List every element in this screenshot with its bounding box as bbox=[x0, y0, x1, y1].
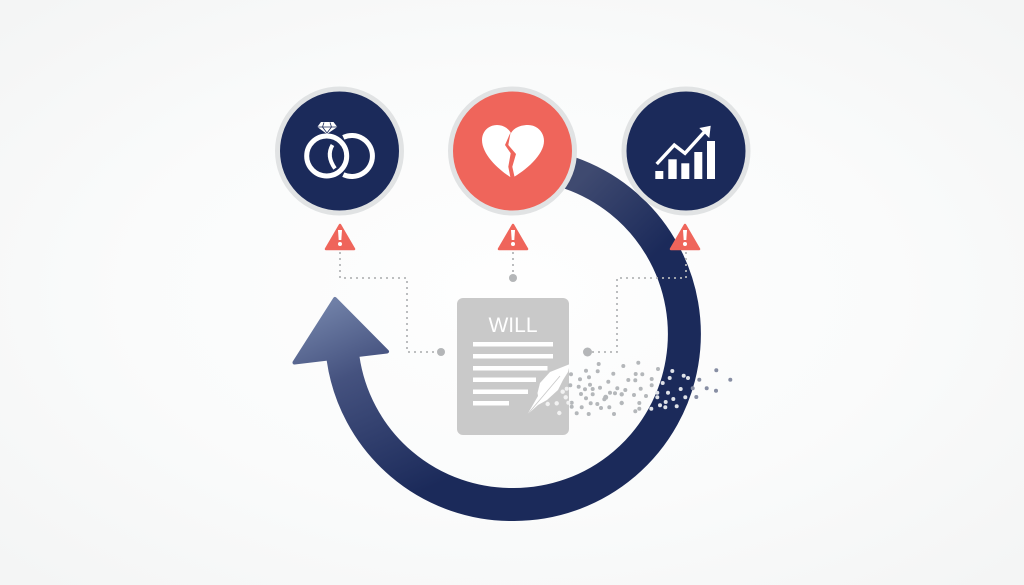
circle: growth chart bbox=[624, 89, 748, 213]
document title: WILL bbox=[488, 314, 538, 337]
circular arrow bbox=[294, 173, 684, 505]
grey particles bbox=[568, 361, 660, 416]
warning icon: centre bbox=[499, 225, 527, 249]
connector dot: right bbox=[583, 348, 592, 356]
document text lines bbox=[473, 342, 553, 406]
warning icon: right bbox=[671, 225, 699, 249]
circle: broken heart bbox=[450, 89, 574, 213]
connector: chart warning to will bbox=[590, 252, 686, 352]
dissolving particles bbox=[546, 361, 732, 416]
will document bbox=[457, 298, 570, 435]
icon: quill bbox=[527, 364, 570, 415]
icon: rings with diamond bbox=[307, 122, 372, 176]
circle: wedding rings bbox=[278, 89, 402, 213]
connector: rings warning to will bbox=[340, 252, 438, 352]
warning icon: left bbox=[326, 225, 354, 249]
connector dot: top bbox=[509, 274, 517, 282]
connector: heart warning to will bbox=[512, 252, 514, 276]
connector dot: left bbox=[437, 348, 445, 356]
particles over the arrow bbox=[649, 369, 690, 411]
icon: bar chart with rising arrow bbox=[655, 126, 715, 179]
icon: broken heart bbox=[482, 125, 544, 179]
particles past the arrow bbox=[691, 368, 732, 399]
particles over the document bbox=[546, 387, 570, 415]
